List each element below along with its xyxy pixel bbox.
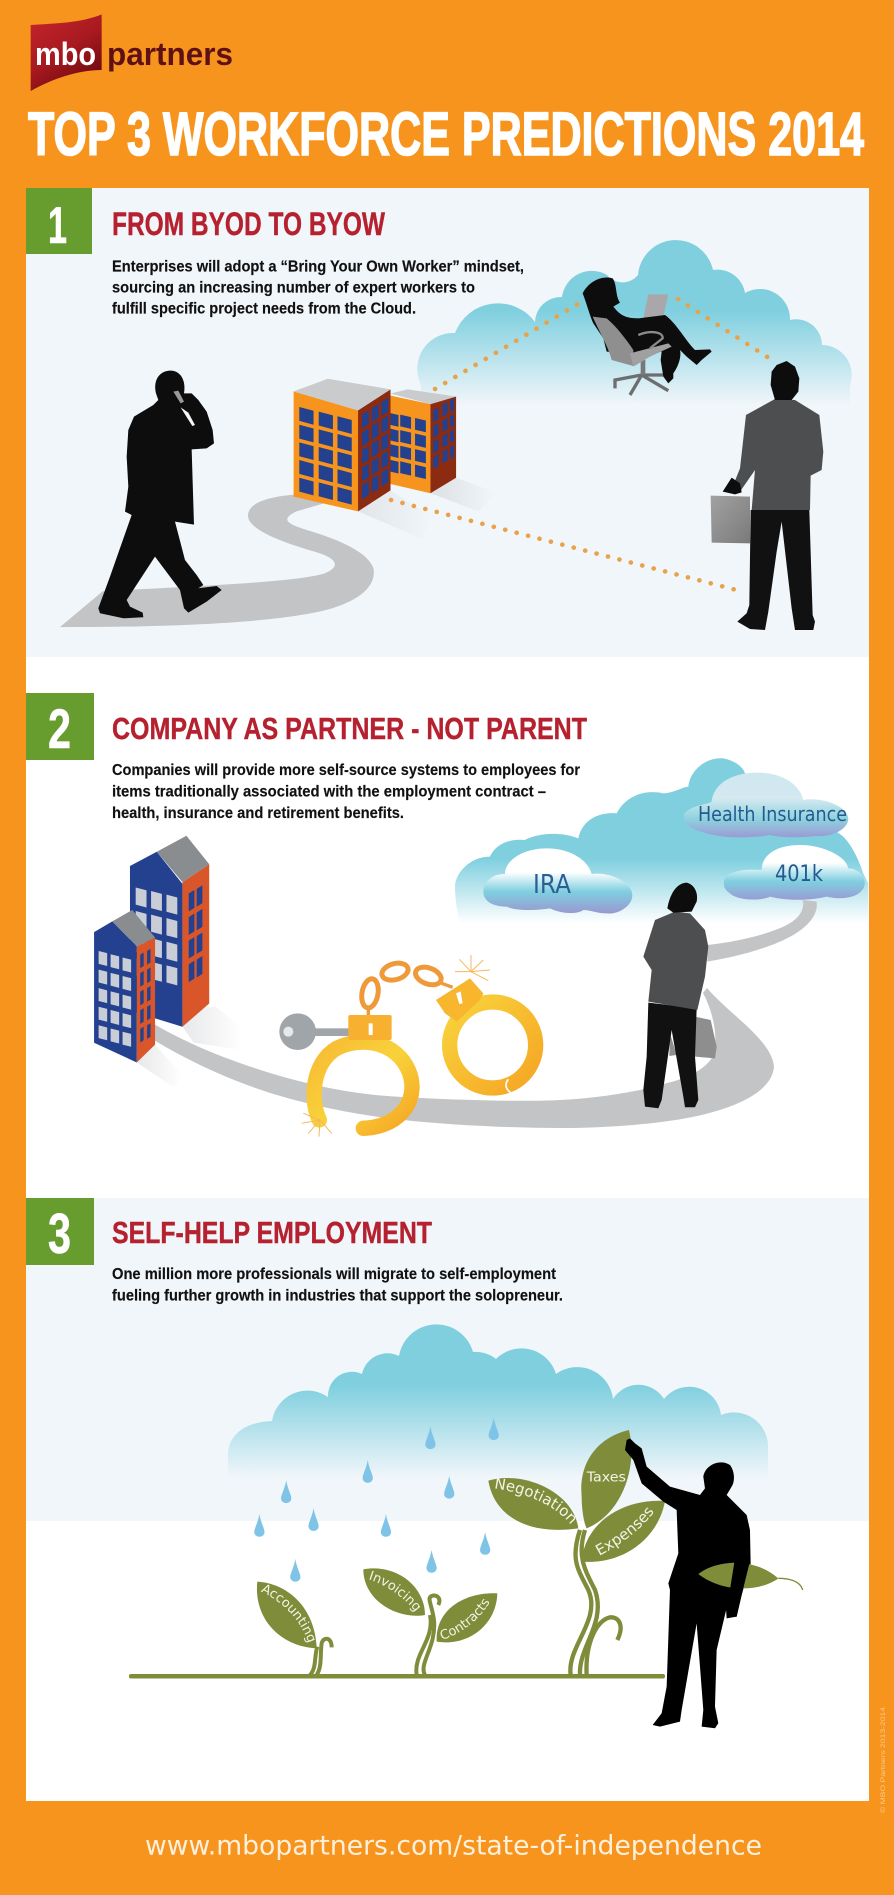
text block 1: fulfill specific project needs from the Cloud. (112, 300, 416, 318)
walking man with phone (98, 371, 222, 618)
tall plant (488, 1430, 665, 1674)
footer url: www.mbopartners.com/state-of-independence (145, 1831, 762, 1862)
heading 3: SELF-HELP EMPLOYMENT (112, 1215, 432, 1250)
big cloud (455, 758, 868, 927)
ground line (129, 1674, 665, 1678)
text block 3: One million more professionals will migrate to self-employment (112, 1266, 557, 1283)
tall plant leaf labels: Negotiation (495, 1478, 576, 1524)
sub-cloud: Health Insurance: Health Insurance (698, 802, 847, 826)
right cuff (450, 1002, 536, 1088)
raindrops (254, 1417, 499, 1582)
text block 1: Enterprises will adopt a “Bring Your Own Worker” mindset, (112, 258, 524, 276)
number badge 1 (26, 188, 92, 255)
building shadows (137, 1007, 242, 1087)
text block 2: Companies will provide more self-source systems to employees for (112, 762, 580, 779)
tall plant leaf labels (495, 1471, 654, 1556)
panel: from BYOD to BYOW (26, 188, 869, 657)
text block 2: items traditionally associated with the employment contract – (112, 783, 546, 800)
road (60, 495, 374, 627)
number badge 3 (26, 1198, 94, 1266)
panel: self-help employment (26, 1198, 869, 1801)
tall plant leaf labels: Expenses (595, 1508, 654, 1556)
chain (360, 960, 453, 1016)
tall plant leaf labels: Taxes (586, 1471, 626, 1486)
sparks (302, 955, 490, 1137)
sub-cloud: IRA (483, 848, 632, 914)
logo: partners (107, 36, 233, 72)
sub-cloud: 401k: 401k (775, 862, 823, 887)
key (279, 1013, 370, 1050)
logo (31, 14, 233, 91)
buildings (94, 836, 209, 1062)
handcuffs and key (279, 955, 536, 1137)
open left cuff (314, 1042, 412, 1128)
heading 1: FROM BYOD TO BYOW (112, 206, 386, 242)
small plant leaf labels: Invoicing (370, 1570, 420, 1612)
number badge 3: 3 (48, 1202, 71, 1266)
sub-cloud: 401k (724, 845, 865, 900)
sub-cloud: IRA: IRA (533, 870, 571, 900)
man looking at cloud (643, 883, 717, 1108)
text block 2: health, insurance and retirement benefits. (112, 805, 404, 822)
panel: company as partner (26, 657, 869, 1198)
leaf held behind arm (698, 1563, 778, 1588)
number badge 2 (26, 693, 94, 760)
number badge 1: 1 (48, 197, 67, 255)
small plant leaf labels: Accounting (260, 1584, 315, 1642)
small plants (256, 1568, 498, 1674)
woman on office chair with laptop (583, 277, 712, 395)
standing man with briefcase (711, 361, 823, 630)
number badge 2: 2 (48, 697, 71, 760)
road (152, 988, 774, 1128)
copyright note: © MBO Partners 2013-2014 (880, 1706, 887, 1813)
text block 3: fueling further growth in industries that support the solopreneur. (112, 1288, 563, 1305)
text block 3 (112, 1266, 563, 1305)
man reaching for leaf (625, 1438, 803, 1728)
heading 2: COMPANY AS PARTNER - NOT PARENT (112, 711, 587, 746)
rain cloud (228, 1324, 768, 1490)
logo: mbo (35, 36, 96, 72)
text block 2 (112, 762, 580, 822)
dotted connector lines (391, 299, 775, 592)
small plant leaf labels (260, 1570, 489, 1642)
upper road (707, 900, 817, 962)
buildings (294, 379, 496, 539)
small plant leaf labels: Contracts (440, 1598, 489, 1639)
text block 1: sourcing an increasing number of expert workers to (112, 280, 475, 296)
sub-cloud: Health Insurance (683, 773, 848, 837)
text block 1 (112, 258, 524, 318)
cloud (417, 240, 852, 412)
